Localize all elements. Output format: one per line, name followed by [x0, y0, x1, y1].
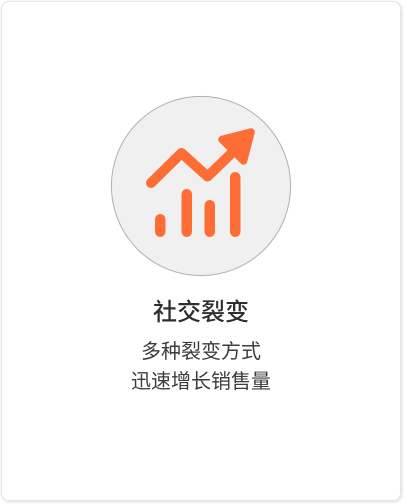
text block: description: 迅速增长销售量: [131, 371, 271, 393]
circle background: [111, 96, 291, 276]
heading: 社交裂变: [153, 299, 249, 326]
text block: description: 多种裂变方式: [141, 341, 261, 363]
icon: rising arrow line: [151, 132, 251, 183]
text block: description: [131, 340, 271, 393]
icon: bars: [155, 172, 240, 237]
